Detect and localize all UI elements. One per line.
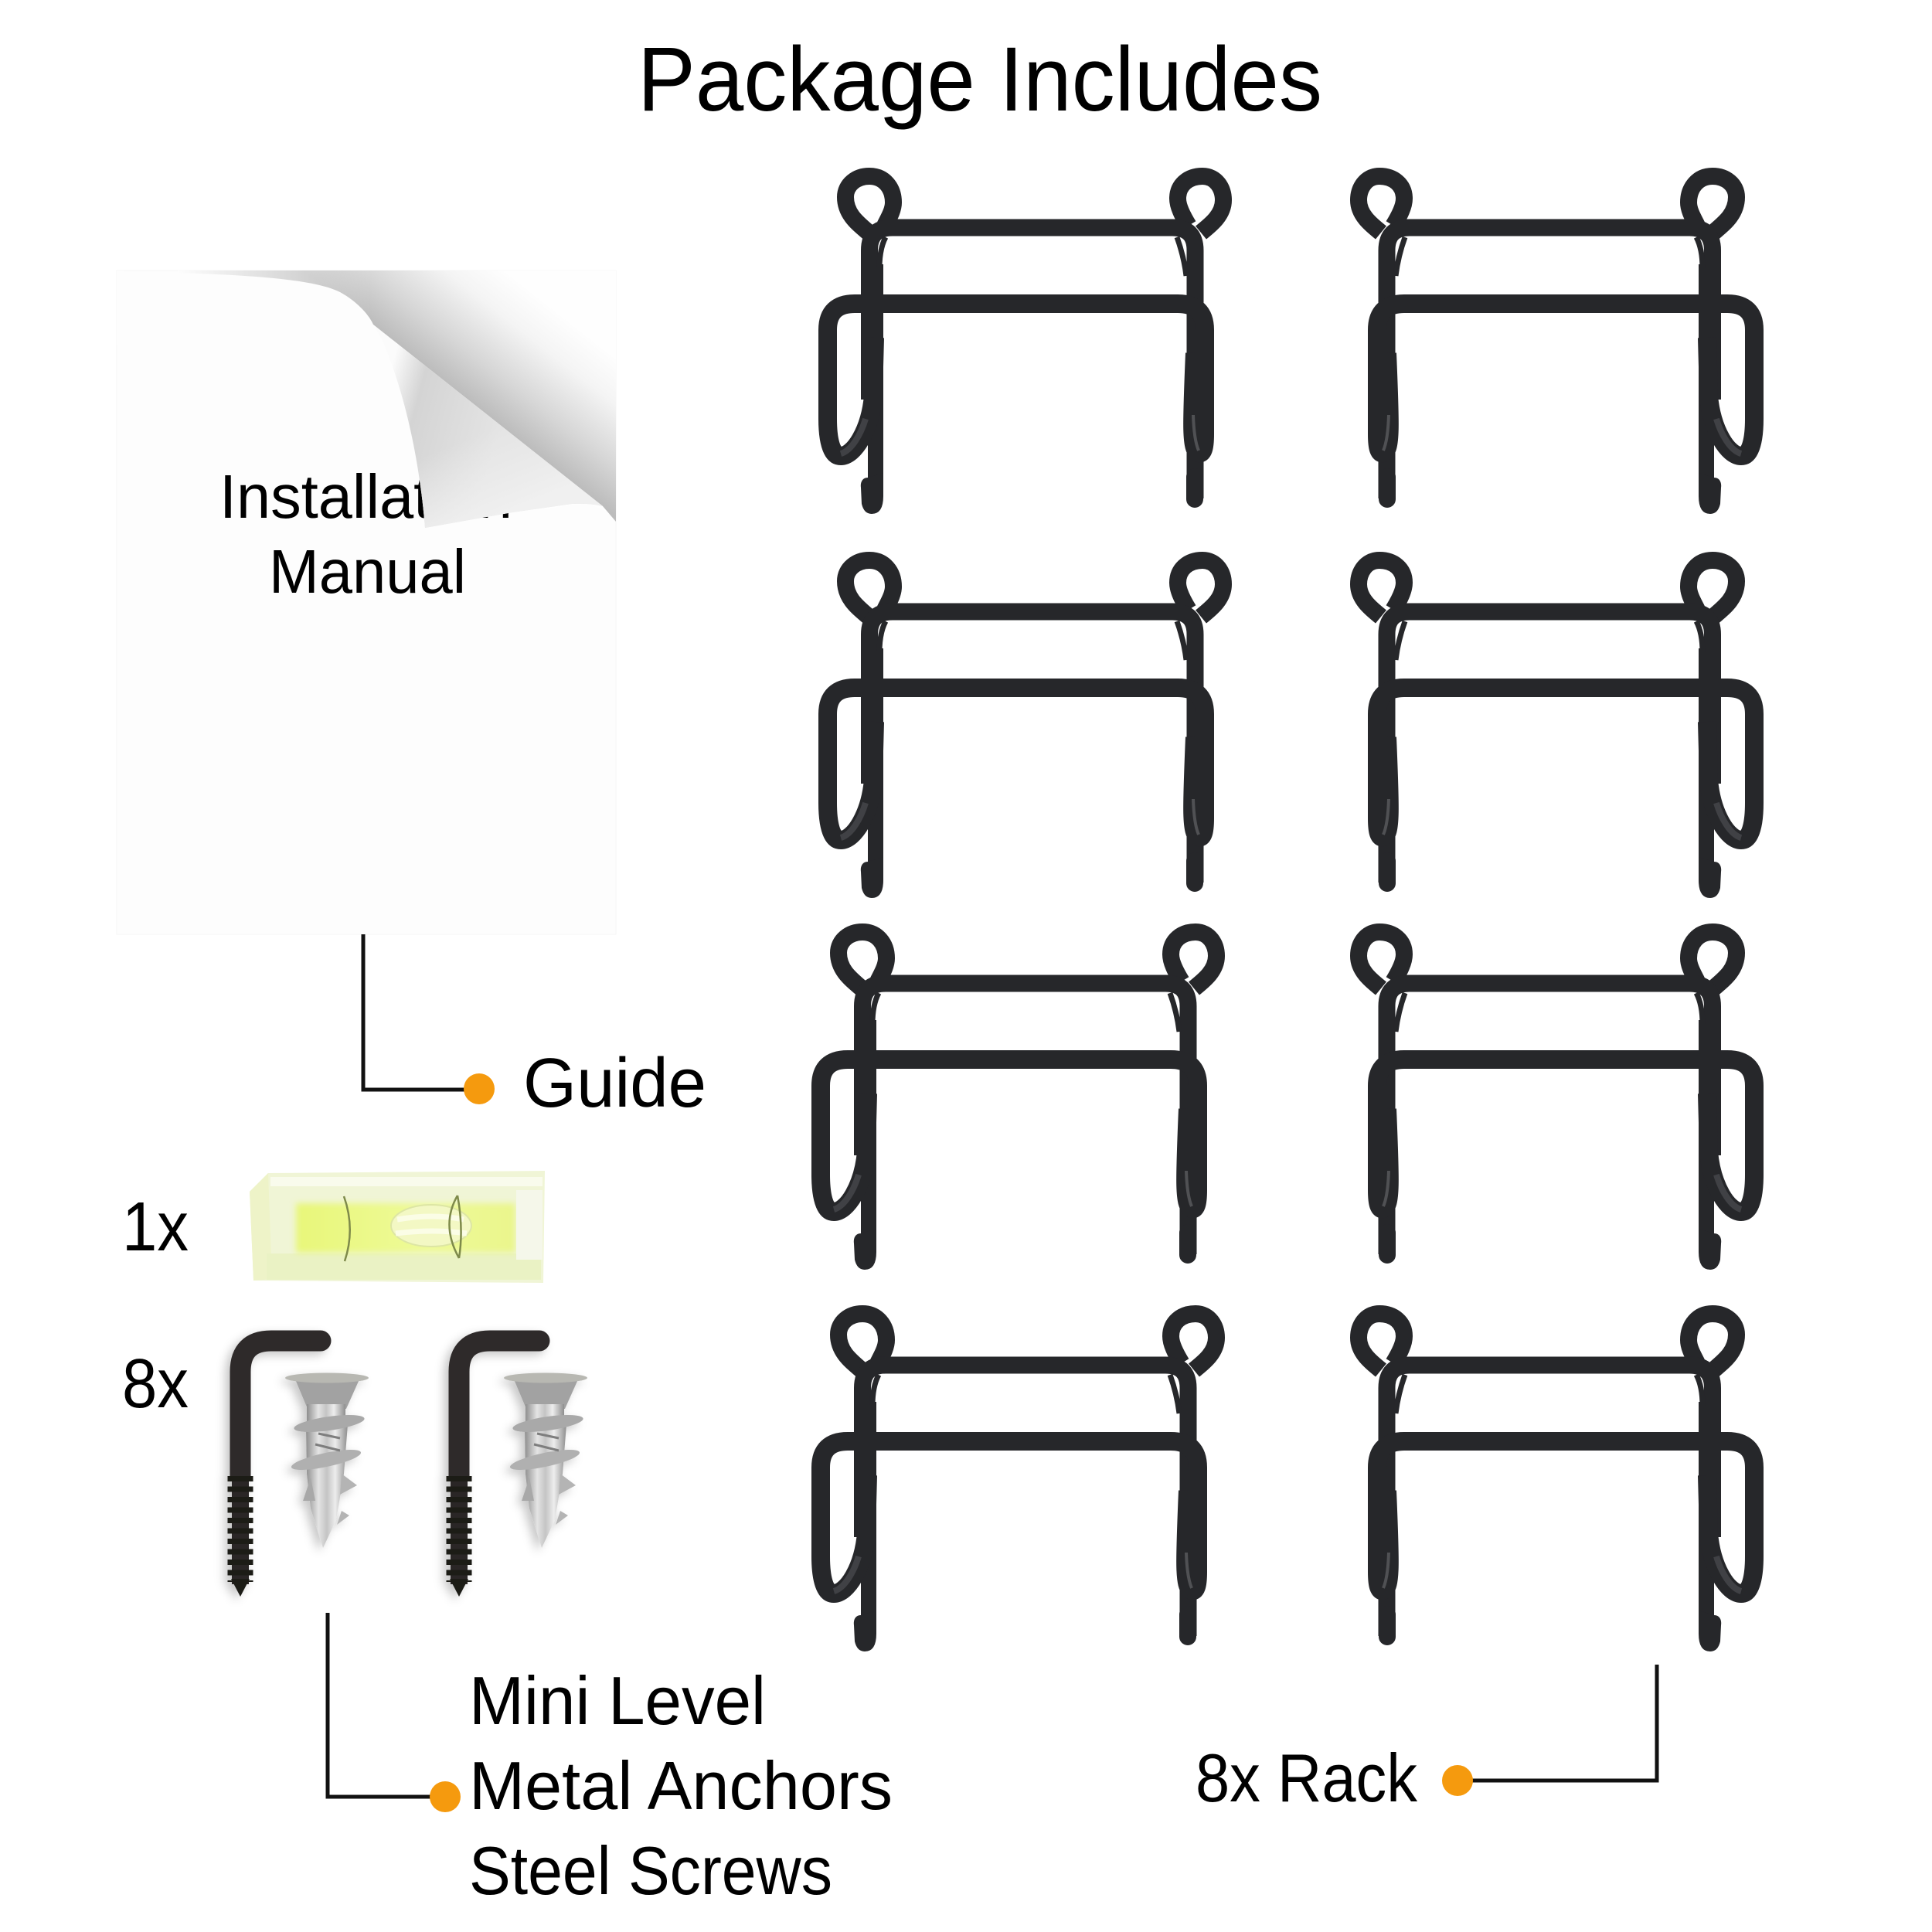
callout: hardware line and dot [328,1613,461,1812]
rack: column 2 row 1 [1359,176,1754,514]
rack: column 2 row 3 [1359,932,1754,1270]
orange dot [464,1073,495,1104]
rack: column 2 row 4 [1359,1314,1754,1651]
page curl [117,270,616,528]
rack: column 1 row 1 [828,176,1223,514]
icon: metal anchor 2 [504,1372,587,1548]
rack: column 1 row 2 [828,560,1223,898]
icon: steel screw 2 [450,1331,550,1597]
hardware list: Metal Anchors [469,1747,893,1824]
hardware list: Steel Screws [469,1832,832,1909]
callout: guide [363,934,706,1122]
orange dot [430,1781,461,1812]
guide label: Guide [523,1045,706,1122]
callout: rack [1196,1665,1657,1816]
icon: metal anchor 1 [285,1372,369,1548]
icon: steel screw 1 [231,1331,331,1597]
quantity label: 1x: 1x [122,1189,189,1266]
rack: column 2 row 2 [1359,560,1754,898]
rack: column 1 row 3 [821,932,1216,1270]
icon: mini level [250,1171,545,1283]
manual title text: Manual [269,537,466,606]
quantity label: 8x: 8x [122,1345,189,1423]
manual title text: Installation [219,462,512,531]
hardware list [469,1662,893,1909]
orange dot [1442,1765,1473,1796]
rack label: 8x Rack [1196,1740,1418,1816]
title: Package Includes [638,29,1322,131]
hardware list: Mini Level [469,1662,766,1739]
manual page sheet [117,270,616,934]
manual title text [219,462,512,606]
panel: installation manual [117,270,616,934]
rack: column 1 row 4 [821,1314,1216,1651]
